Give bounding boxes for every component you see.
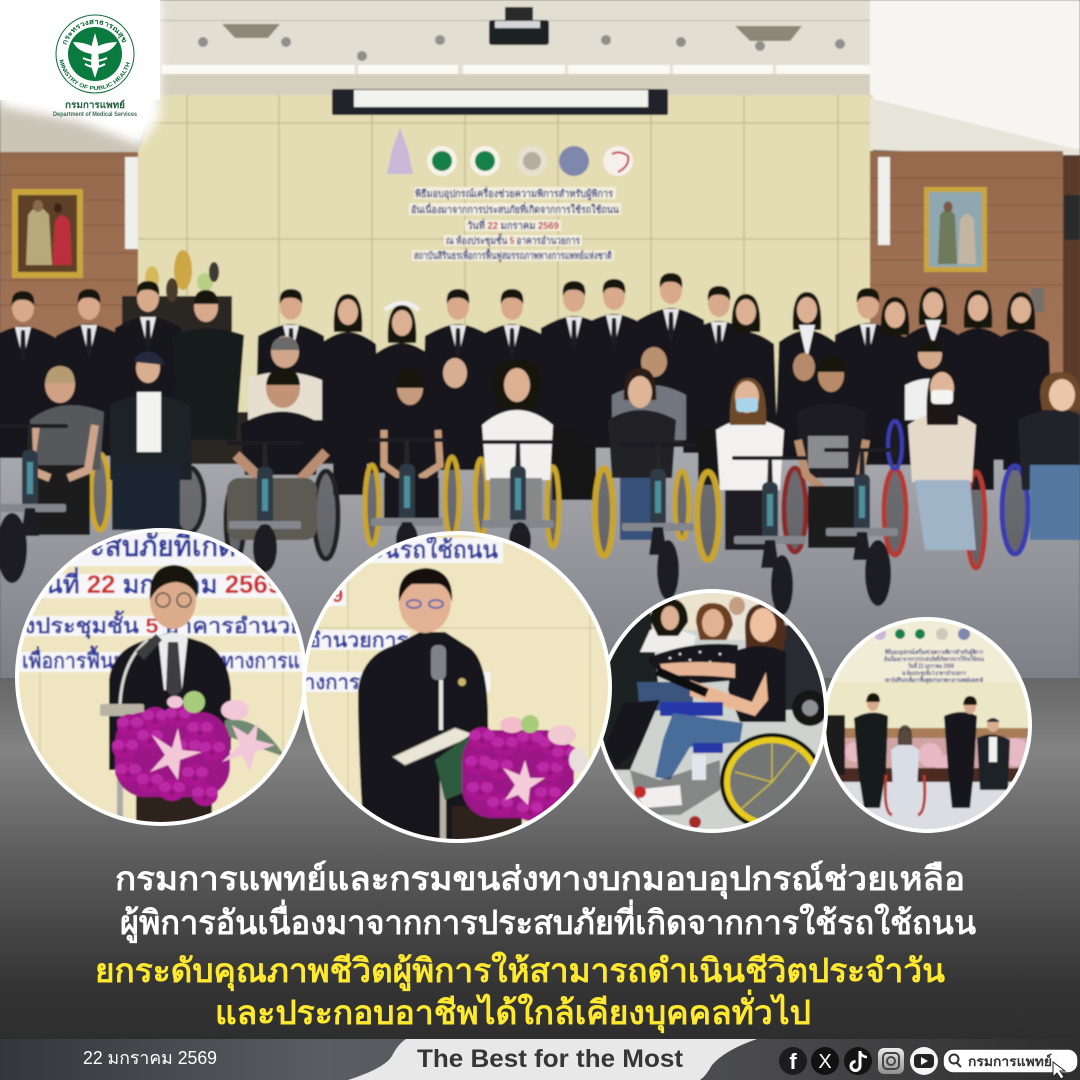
icon: X xyxy=(811,1047,839,1075)
right royal portrait xyxy=(924,187,987,272)
backdrop text bands: อำนวยการ xyxy=(308,630,408,652)
backdrop text bands xyxy=(15,525,305,675)
backdrop text bands: นที่ 22 มกราคม 2569 xyxy=(45,567,282,599)
backdrop text bands xyxy=(300,535,503,694)
projector xyxy=(489,7,549,45)
inset photo 4: handover ceremony: ณ ห้องประชุมชั้น 5 อาคารอำนวยการ xyxy=(902,667,967,677)
department name Thai: กรมการแพทย์ xyxy=(65,99,125,111)
podium microphone xyxy=(431,645,446,680)
icon: X: X xyxy=(818,1051,832,1073)
backdrop event text: วันที่ 22 มกราคม 2569 xyxy=(467,218,559,232)
icon: facebook xyxy=(779,1047,807,1075)
back row seated guests xyxy=(248,336,955,470)
backdrop event text: ณ ห้องประชุมชั้น 5 อาคารอำนวยการ xyxy=(446,233,581,247)
sub-headline: yellow, two lines: และประกอบอาชีพได้ใกล้เคียงบุคคลทั่วไป xyxy=(215,989,811,1034)
emblem: Ministry of Public Health seal: กระทรวงสาธารณสุข xyxy=(63,20,126,45)
inset photo 1: speaker with glasses at podium xyxy=(10,525,310,830)
sub-headline: yellow, two lines xyxy=(95,951,945,1034)
wall speakers xyxy=(125,157,890,249)
floor carpet xyxy=(0,440,1080,690)
speaker xyxy=(358,632,490,850)
headline: white title, two lines: กรมการแพทย์และกรมขนส่งทางบกมอบอุปกรณ์ช่วยเหลือ xyxy=(115,860,965,900)
backdrop text bands: างการแพทย์แห่งชาติ xyxy=(304,671,486,694)
ceiling spotlights and vents xyxy=(198,24,913,61)
backdrop event text: สถาบันสิรินธรเพื่อการฟื้นฟูสมรรถภาพทางการแพทย์แห่งชาติ xyxy=(414,248,612,263)
orchid bouquet xyxy=(112,691,285,806)
emblem: Ministry of Public Health seal xyxy=(56,14,134,94)
inset photo 2: speaker in black at podium xyxy=(300,530,615,850)
backdrop event text: อันเนื่องมาจากการประสบภัยที่เกิดจากการใช้รถใช้ถนน xyxy=(411,202,619,216)
back wall cream panels xyxy=(138,95,873,415)
right bright ceiling corner xyxy=(870,0,1080,150)
inset photo 3: smiling wheelchair users xyxy=(590,585,830,835)
right wood wall xyxy=(870,98,1080,441)
icon: youtube xyxy=(910,1047,938,1075)
inset photo 4: handover ceremony xyxy=(824,617,1032,833)
inset photo 4: handover ceremony: สถาบันสิรินธรเพื่อการฟื้นฟูสมรรถภาพทางการแพทย์แห่งชาติ xyxy=(885,674,983,685)
backdrop text bands: ะสบภัยที่เกิด xyxy=(90,525,236,563)
wheelchair wheels xyxy=(91,421,1028,568)
ceiling xyxy=(0,0,1080,100)
icon: instagram xyxy=(878,1048,904,1074)
slogan: The Best for the Most xyxy=(417,1045,684,1073)
podium base xyxy=(135,794,213,822)
emblem: Ministry of Public Health seal: MINISTRY OF PUBLIC HEALTH xyxy=(60,60,130,90)
date: 22 มกราคม 2569 xyxy=(83,1048,217,1068)
photo background: group photo in the hall xyxy=(0,0,1080,690)
inset photo 4: handover ceremony: อันเนื่องมาจากการประสบภัยที่เกิดจากการใช้รถใช้ถนน xyxy=(884,654,985,663)
backdrop text bands: ะฉรถใช้ถนน xyxy=(372,535,499,564)
speaker xyxy=(109,632,231,770)
footer bar xyxy=(0,1039,1080,1080)
backdrop organisation logos xyxy=(387,128,633,176)
headline: white title, two lines xyxy=(115,860,976,944)
department name English: Department of Medical Services xyxy=(53,112,138,118)
backdrop event text xyxy=(409,186,621,263)
logo block top-left xyxy=(0,0,166,148)
inset photo 4: handover ceremony: พิธีมอบอุปกรณ์เครื่องช่วยความพิการสำหรับผู้พิการ xyxy=(885,647,984,657)
icon: tiktok xyxy=(844,1047,872,1075)
podium with book xyxy=(393,728,475,765)
backdrop text bands: 9 xyxy=(332,585,343,607)
inset photo 4: handover ceremony: วันที่ 22 มกราคม 2569 xyxy=(908,661,955,670)
footer light slogan band xyxy=(348,1039,757,1080)
left wood wall xyxy=(0,100,160,442)
backdrop text bands: เพื่อการฟื้นฟูสมรรถภาพทางการแ xyxy=(22,645,300,675)
bottom grey gradient panel xyxy=(0,678,1080,1040)
headline: white title, two lines: ผู้พิการอันเนื่องมาจากการประสบภัยที่เกิดจากการใช้รถใช้ถนน xyxy=(120,899,976,944)
backdrop text bands: งประชุมชั้น 5 อาคารอำนวย xyxy=(24,610,304,640)
shrine with Buddha images xyxy=(122,250,232,338)
front row seated wheelchair users xyxy=(30,352,1080,550)
podium microphone xyxy=(120,640,148,705)
sub-headline: yellow, two lines: ยกระดับคุณภาพชีวิตผู้พิการให้สามารถดำเนินชีวิตประจำวัน xyxy=(95,951,945,992)
ceiling light strips xyxy=(162,65,871,74)
projection screen housing xyxy=(332,89,668,115)
orchid bouquet xyxy=(435,715,587,821)
backdrop event text: พิธีมอบอุปกรณ์เครื่องช่วยความพิการสำหรับผู้พิการ xyxy=(415,186,614,201)
electric handbike attachments xyxy=(0,424,900,615)
search pill xyxy=(943,1049,1078,1079)
left royal portrait xyxy=(12,189,83,278)
icon: facebook: f xyxy=(789,1049,797,1074)
standing row of officials xyxy=(0,273,1053,500)
search pill: กรมการแพทย์ xyxy=(968,1053,1052,1069)
